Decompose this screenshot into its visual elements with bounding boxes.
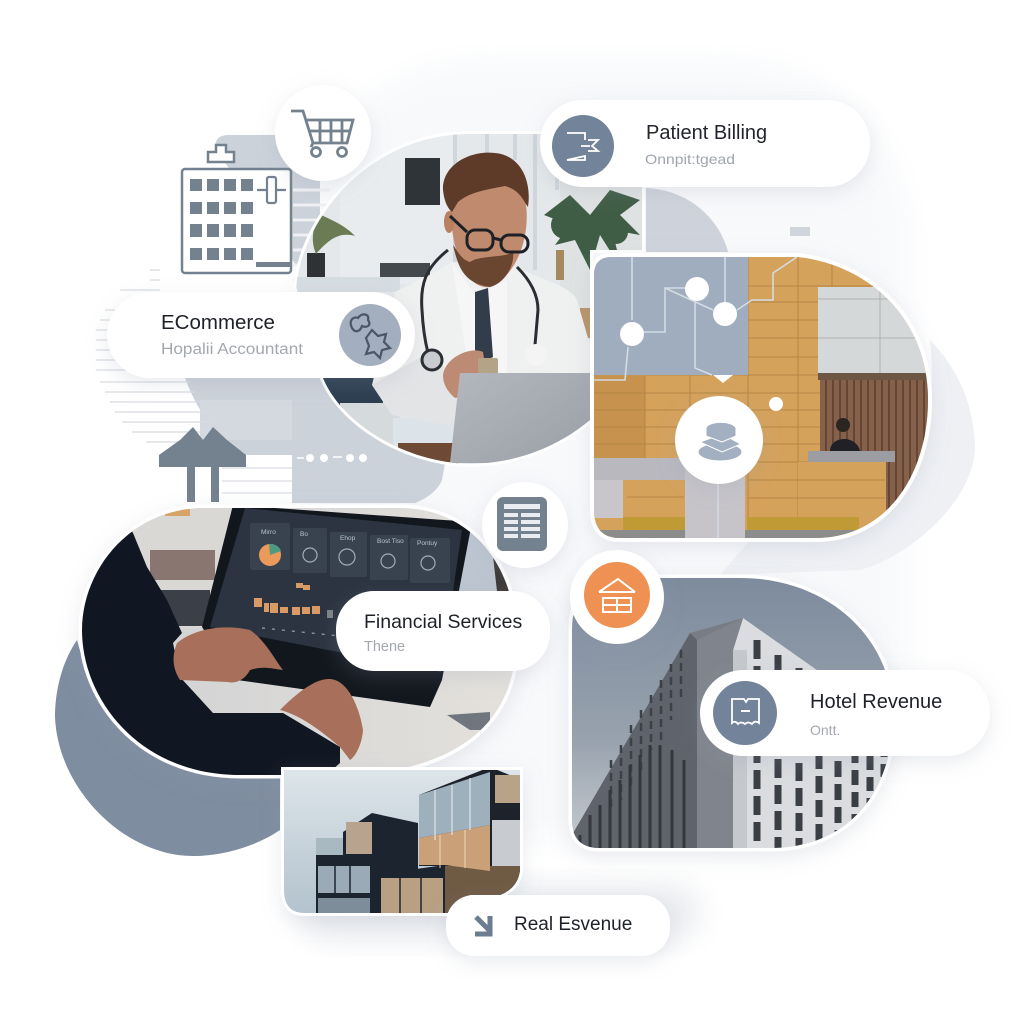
mini bar chart — [254, 583, 320, 615]
panel: tablet dashboard photo — [78, 505, 522, 780]
shirt and tie — [452, 262, 507, 378]
sublabel: Ontt. — [810, 722, 840, 738]
screen labels: Bost Tiso — [377, 538, 404, 545]
panel: glass building photo — [284, 767, 522, 915]
small devices — [210, 713, 270, 726]
label: Financial Services: Financial Services — [364, 611, 522, 633]
floor and sofa — [323, 378, 383, 408]
background shapes — [55, 60, 975, 940]
card: Financial Services — [336, 591, 550, 671]
icon: billing — [552, 115, 614, 177]
icon: puzzle — [339, 304, 401, 366]
label: Patient Billing: Patient Billing — [646, 122, 767, 144]
icon: receipt — [713, 681, 777, 745]
tablet — [202, 505, 472, 707]
screen labels: Bo — [300, 531, 308, 538]
panel: hotel tower photo — [570, 575, 900, 850]
plants — [544, 190, 640, 270]
screen labels: Mirro — [261, 529, 276, 536]
label: Real Esvenue: Real Esvenue — [514, 914, 632, 935]
card: Patient Billing — [540, 100, 870, 187]
label: Hotel Revenue: Hotel Revenue — [810, 691, 942, 713]
screen labels: Pontuy — [417, 540, 438, 547]
doctor coat — [372, 262, 590, 402]
icon: signpost arrows — [159, 427, 246, 502]
sublabel: Hopalii Accountant — [161, 341, 304, 358]
tower windows — [757, 640, 884, 848]
screen labels — [261, 529, 438, 547]
icon: shopping cart bubble — [275, 85, 371, 181]
icon: table bubble — [482, 482, 568, 568]
stethoscope — [422, 250, 538, 353]
card: Real Esvenue — [446, 895, 670, 956]
sublabel: Thene — [364, 639, 405, 655]
screen labels: Ehop — [340, 535, 356, 542]
icon: hospital building grid — [182, 145, 291, 273]
progress dots — [297, 454, 367, 462]
panel: hotel lobby — [590, 250, 935, 545]
icon: orange house bubble — [570, 550, 664, 644]
card: ECommerce — [107, 292, 415, 378]
hand and laptop — [443, 350, 486, 398]
suit sleeve — [78, 520, 340, 778]
head — [450, 182, 527, 287]
sublabel: Onnpit:tgead — [645, 151, 735, 167]
label: ECommerce: ECommerce — [161, 311, 275, 334]
panel: doctor photo — [290, 130, 650, 470]
card: Hotel Revenue — [700, 670, 990, 756]
hands — [174, 627, 283, 682]
icon: arrow — [475, 916, 490, 934]
icon: stacked cash — [675, 396, 763, 484]
